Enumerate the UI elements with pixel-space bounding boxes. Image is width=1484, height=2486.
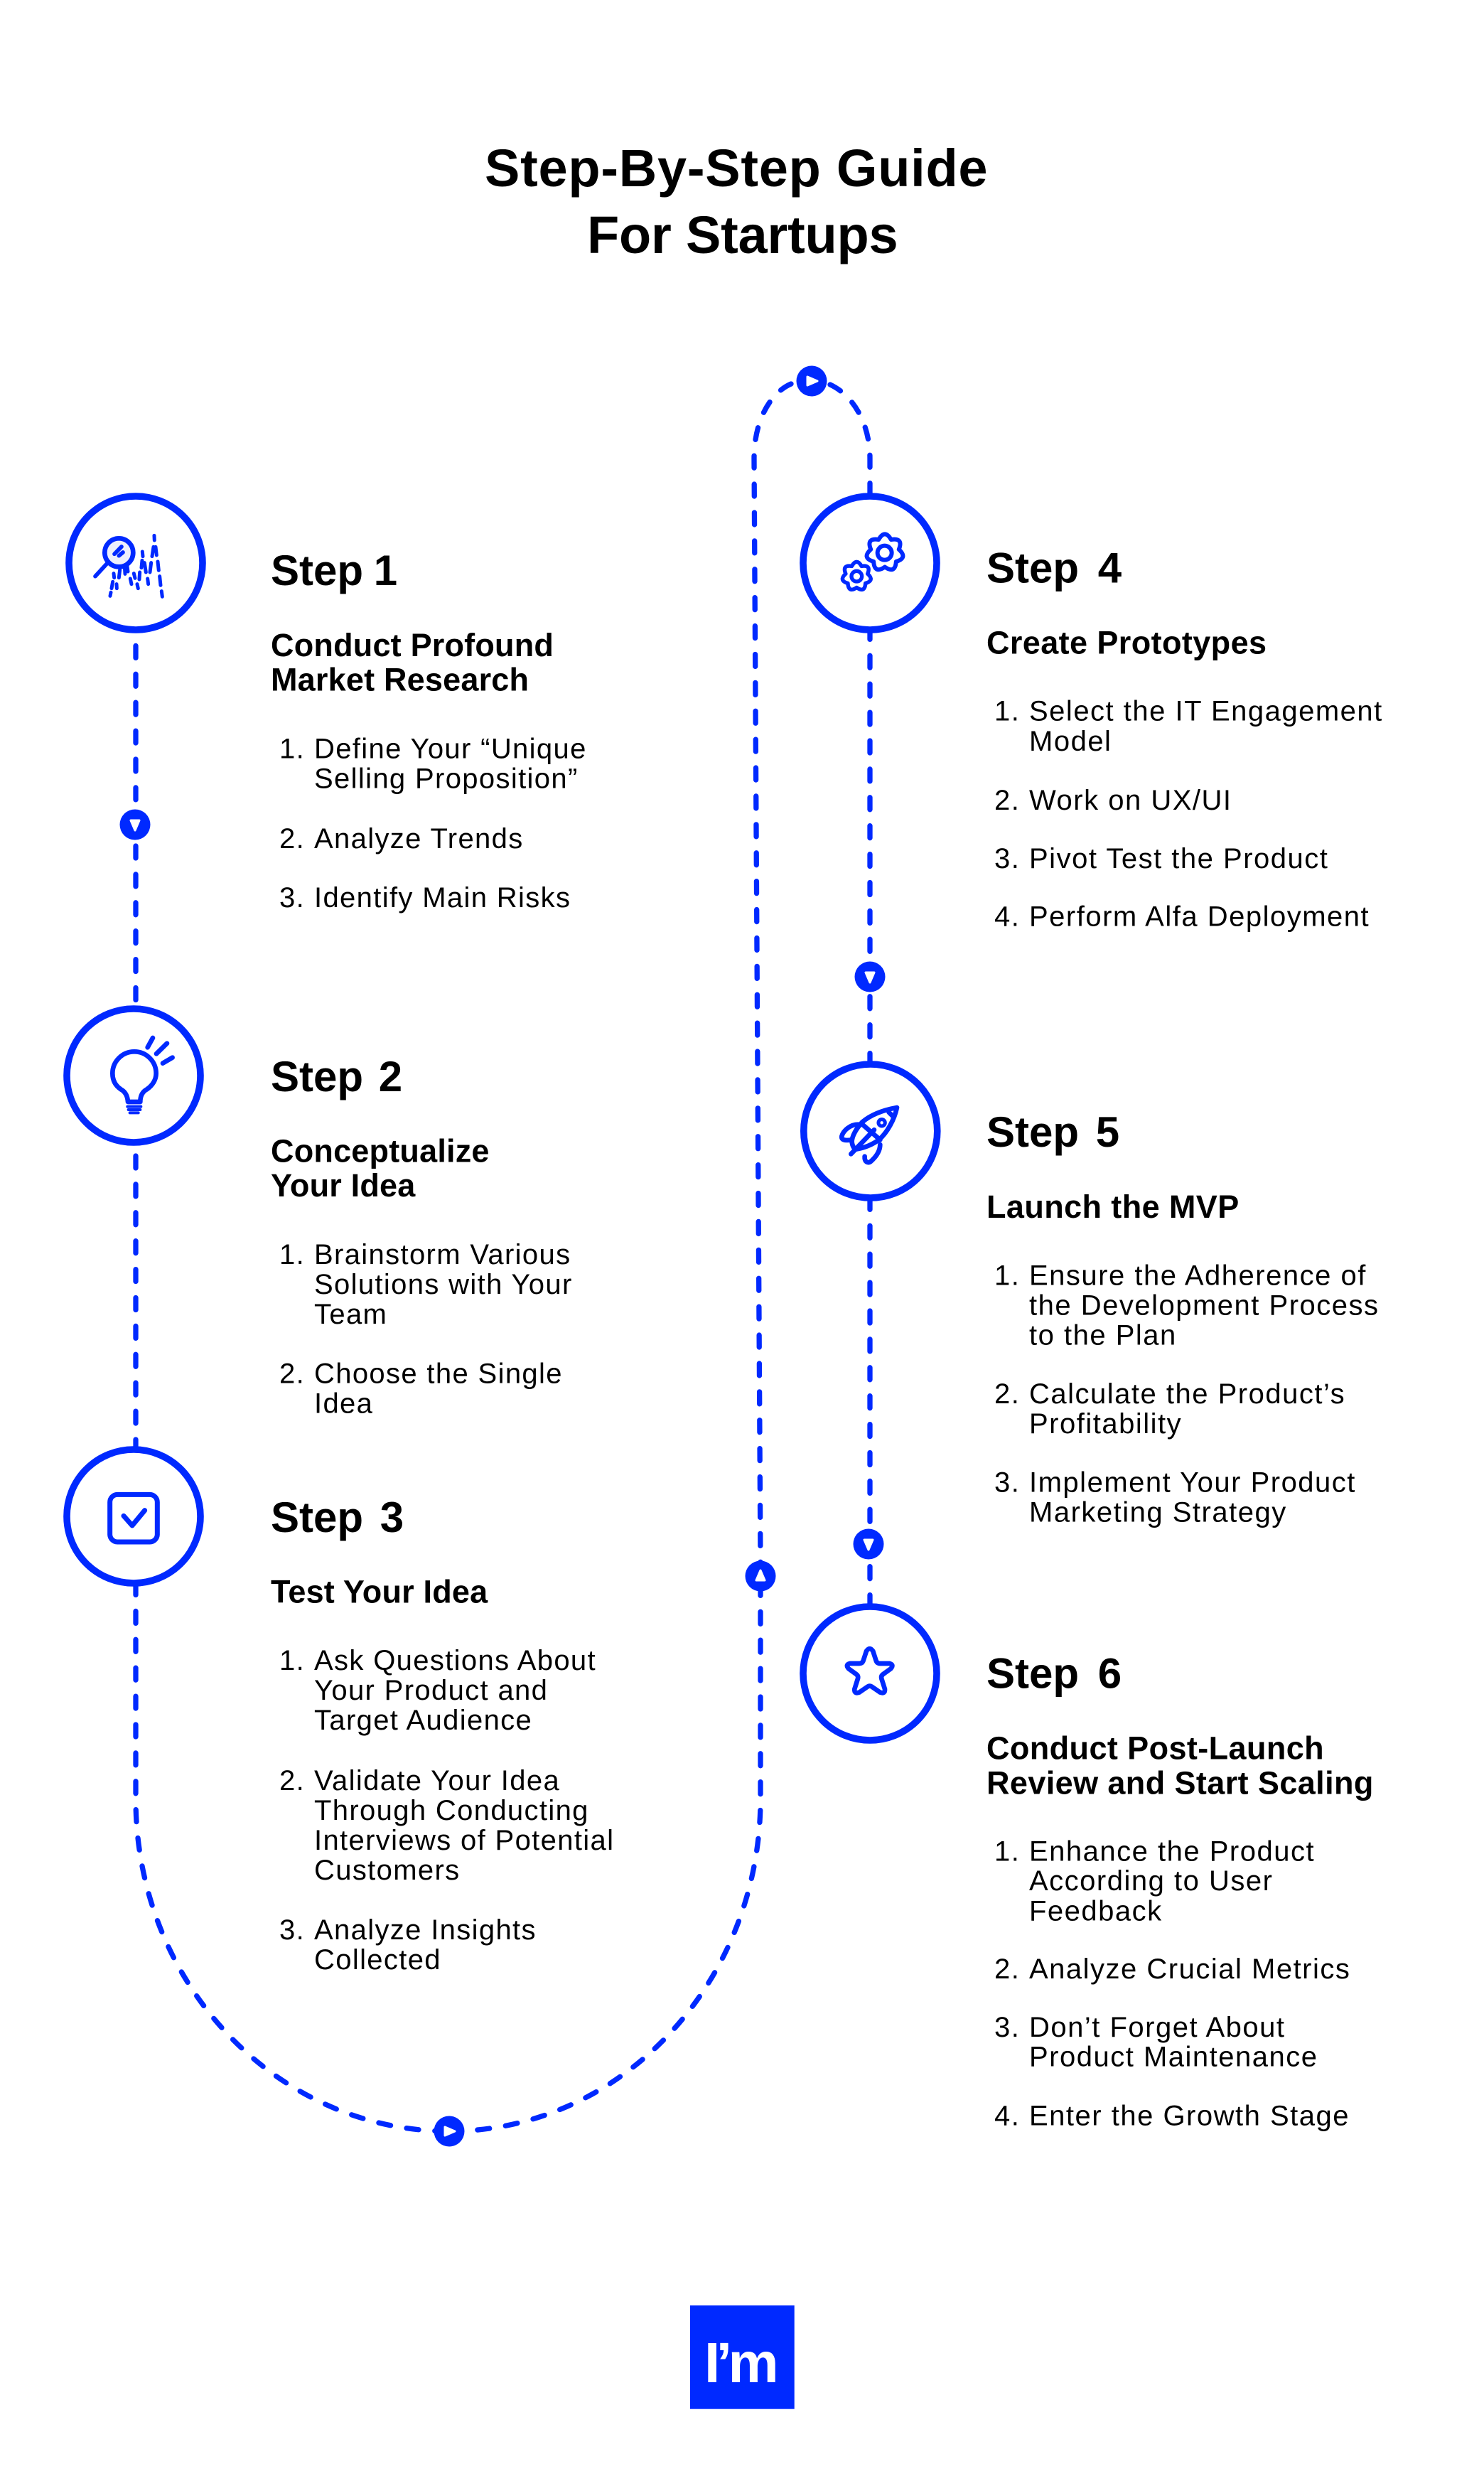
list: step 2: Brainstorm Various (314, 1239, 571, 1270)
subtitle: step 4: Create Prototypes (986, 625, 1267, 661)
list: step 2 (279, 1239, 573, 1419)
list: step 4: Perform Alfa Deployment (1029, 901, 1370, 933)
list: step 3: Your Product and (314, 1675, 548, 1706)
heading: step 1: Step 1 (271, 547, 397, 594)
list: step 6: 3. (994, 2012, 1020, 2043)
dashed path connecting the steps (136, 384, 870, 2131)
list: step 2: Idea (314, 1388, 373, 1419)
list: step 4: 2. (994, 785, 1020, 816)
icon: rocket in circle (804, 1064, 937, 1198)
list: step 1: 1. (279, 734, 305, 765)
panel: step 6 (986, 1650, 1374, 2131)
list: step 1: Selling Proposition” (314, 764, 579, 795)
list: step 4: 4. (994, 901, 1020, 933)
subtitle: step 2 (271, 1133, 490, 1204)
list: step 1: Define Your “Unique (314, 734, 587, 765)
heading: step 5: Step 5 (986, 1108, 1119, 1156)
list: step 3: Target Audience (314, 1705, 532, 1736)
icon: market research magnifier in circle (69, 496, 203, 630)
list: step 3: Through Conducting (314, 1795, 589, 1826)
list: step 5: Ensure the Adherence of (1029, 1260, 1367, 1291)
icon: gears in circle (803, 496, 937, 630)
panel: step 2 (271, 1053, 573, 1419)
subtitle: step 1: Market Research (271, 661, 529, 698)
list: step 3: Validate Your Idea (314, 1765, 560, 1796)
list: step 6: Enter the Growth Stage (1029, 2100, 1350, 2131)
list: step 5: 1. (994, 1260, 1020, 1291)
title (485, 139, 988, 264)
icon: star in circle (803, 1607, 937, 1740)
subtitle: step 1: Conduct Profound (271, 627, 554, 663)
title: Step-By-Step Guide (485, 139, 988, 198)
list: step 1 (279, 734, 587, 914)
list: step 5: to the Plan (1029, 1319, 1177, 1351)
subtitle: step 6: Conduct Post-Launch (986, 1730, 1324, 1766)
heading: step 6: Step 6 (986, 1650, 1122, 1698)
subtitle: step 2: Conceptualize (271, 1133, 490, 1169)
list: step 3: 2. (279, 1765, 305, 1796)
icon: checkbox in circle (67, 1450, 200, 1583)
list: step 4 (994, 696, 1383, 933)
title: For Startups (587, 205, 898, 264)
list: step 6: Analyze Crucial Metrics (1029, 1954, 1350, 1985)
list: step 4: Select the IT Engagement (1029, 696, 1383, 727)
subtitle: step 5: Launch the MVP (986, 1189, 1240, 1225)
list: step 4: 3. (994, 843, 1020, 874)
list: step 3: Ask Questions About (314, 1645, 596, 1676)
list: step 6: Feedback (1029, 1895, 1163, 1927)
list: step 2: Team (314, 1299, 387, 1330)
list: step 4: 1. (994, 696, 1020, 727)
list: step 6: 1. (994, 1836, 1020, 1867)
list: step 5: the Development Process (1029, 1290, 1380, 1321)
list: step 3 (279, 1645, 614, 1976)
heading: step 2: Step 2 (271, 1053, 402, 1100)
list: step 3: Analyze Insights (314, 1914, 537, 1946)
arrow: dot at top of arc (796, 365, 827, 397)
list: step 5: Implement Your Product (1029, 1467, 1356, 1499)
list: step 1: Analyze Trends (314, 823, 524, 854)
list: step 3: Customers (314, 1855, 461, 1886)
subtitle: step 6 (986, 1730, 1374, 1801)
arrow: dot at bottom of curve (434, 2116, 465, 2147)
list: step 4: Model (1029, 726, 1112, 757)
list: step 6 (994, 1836, 1350, 2131)
panel: step 3 (271, 1494, 614, 1976)
arrow: dot between step 1 and step 2 (119, 809, 151, 840)
list: step 3: Interviews of Potential (314, 1825, 614, 1856)
logo: I’m (704, 2331, 775, 2394)
list: step 1: 3. (279, 882, 305, 914)
list: step 5: 3. (994, 1467, 1020, 1499)
heading: step 4: Step 4 (986, 544, 1122, 591)
list: step 2: Choose the Single (314, 1358, 563, 1389)
arrow: dot between step 4 and step 5 (854, 961, 886, 992)
list: step 5: Calculate the Product’s (1029, 1378, 1345, 1410)
arrow: dot on rising line (745, 1561, 776, 1591)
list: step 5: Marketing Strategy (1029, 1497, 1287, 1528)
panel: step 1 (271, 547, 587, 914)
list: step 4: Work on UX/UI (1029, 785, 1232, 816)
list: step 6: According to User (1029, 1865, 1273, 1897)
list: step 4: Pivot Test the Product (1029, 843, 1328, 874)
subtitle: step 1 (271, 627, 554, 698)
list: step 5: Profitability (1029, 1408, 1182, 1440)
list: step 2: 2. (279, 1358, 305, 1389)
subtitle: step 2: Your Idea (271, 1167, 416, 1204)
list: step 3: Collected (314, 1944, 441, 1976)
arrow: dot between step 5 and step 6 (853, 1528, 884, 1560)
panel: step 4 (986, 544, 1383, 933)
heading: step 3: Step 3 (271, 1494, 404, 1541)
list: step 2: Solutions with Your (314, 1269, 573, 1300)
list: step 6: Product Maintenance (1029, 2041, 1318, 2072)
list: step 6: Enhance the Product (1029, 1836, 1315, 1867)
logo (690, 2305, 795, 2409)
list: step 1: Identify Main Risks (314, 882, 571, 914)
list: step 6: Don’t Forget About (1029, 2012, 1286, 2043)
list: step 2: 1. (279, 1239, 305, 1270)
subtitle: step 3: Test Your Idea (271, 1574, 488, 1609)
subtitle: step 6: Review and Start Scaling (986, 1764, 1374, 1801)
list: step 3: 1. (279, 1645, 305, 1676)
list: step 5 (994, 1260, 1380, 1528)
list: step 3: 3. (279, 1914, 305, 1946)
list: step 6: 2. (994, 1954, 1020, 1985)
list: step 6: 4. (994, 2100, 1020, 2131)
list: step 5: 2. (994, 1378, 1020, 1410)
list: step 1: 2. (279, 823, 305, 854)
panel: step 5 (986, 1108, 1380, 1528)
icon: light bulb in circle (67, 1009, 200, 1142)
